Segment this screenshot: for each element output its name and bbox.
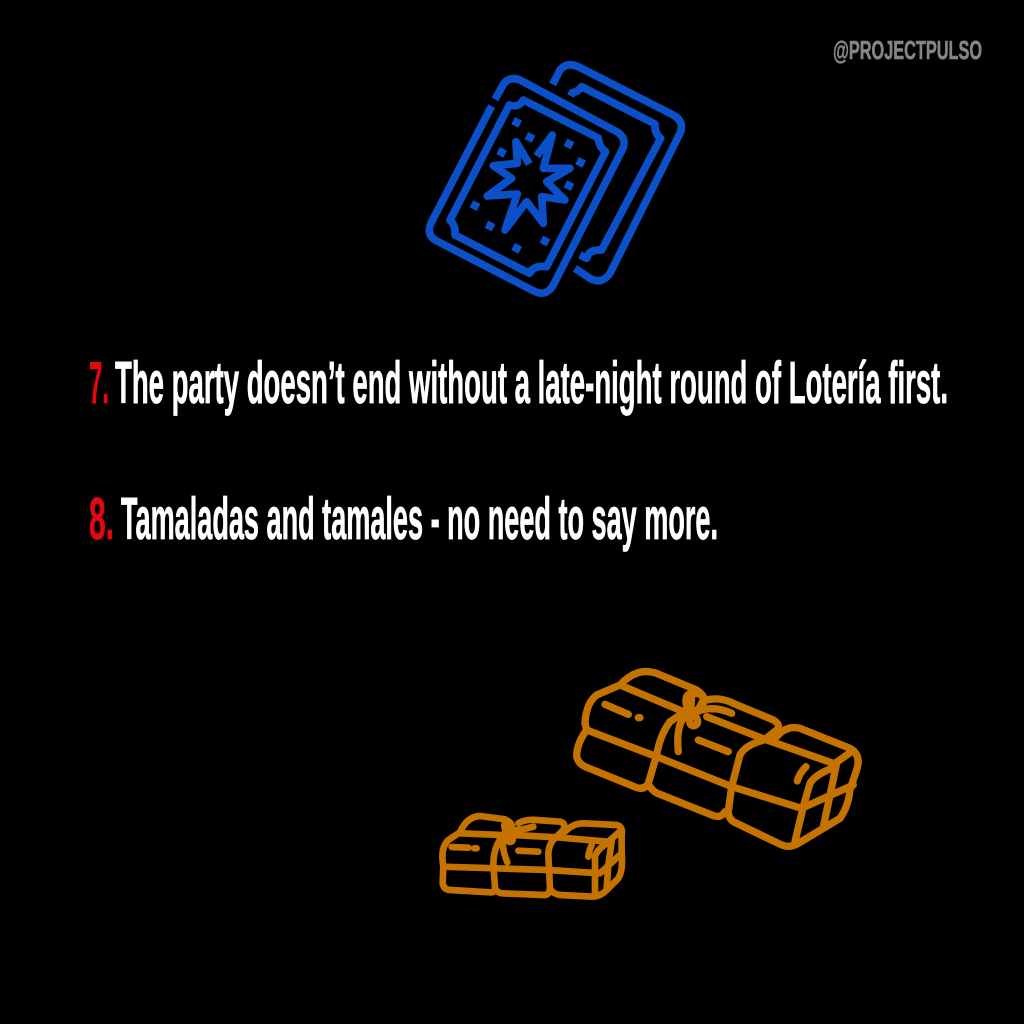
number 8: 8. — [89, 486, 114, 552]
icon: large tamales bundle — [577, 672, 858, 846]
item 7 text — [89, 350, 948, 416]
item 7 text: 7. — [89, 350, 109, 416]
icon: loteria cards — [429, 65, 681, 293]
icon: small tamales bundle — [442, 816, 622, 897]
item 8 text — [89, 486, 718, 552]
